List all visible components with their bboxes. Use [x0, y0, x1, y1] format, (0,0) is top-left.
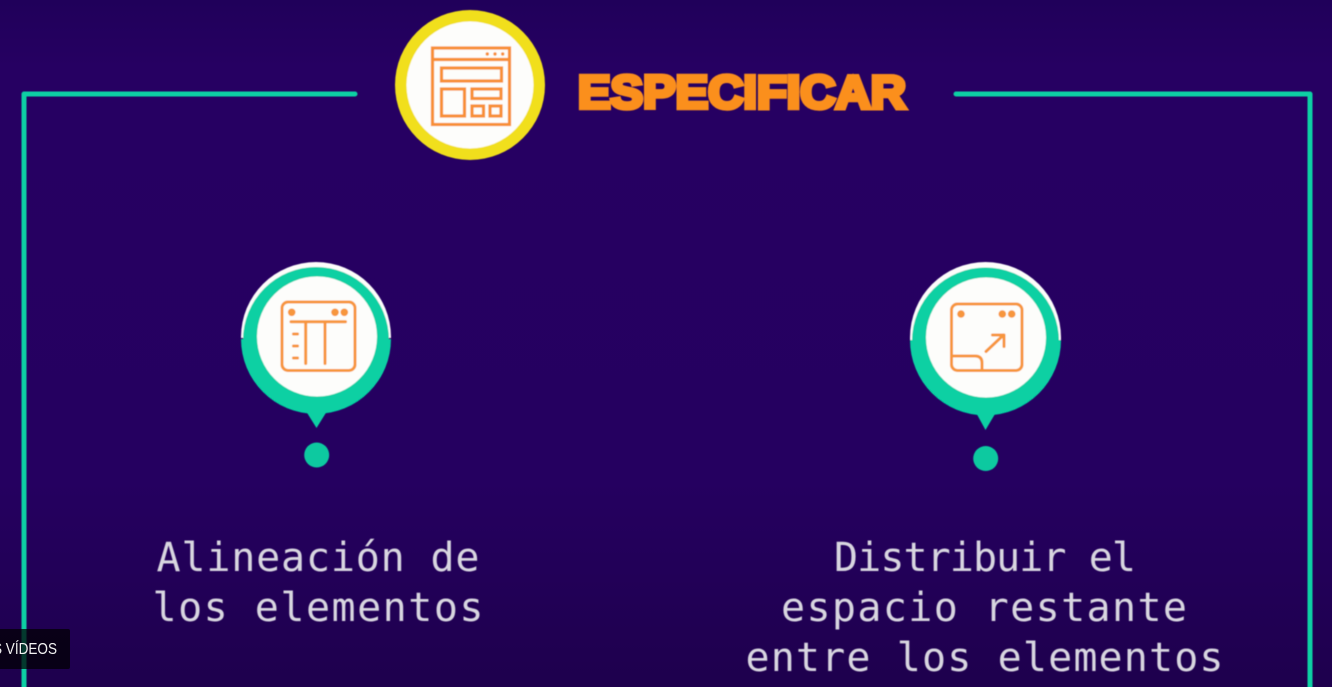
text block: right caption: espacio restante: [781, 585, 1187, 631]
video overlay label: [0, 629, 70, 669]
text block: right caption: entre los elementos: [746, 635, 1224, 681]
text block: left caption: [152, 535, 484, 631]
icon: table alignment: [282, 302, 355, 370]
text block: left caption: los elementos: [152, 585, 484, 631]
dot marker: right: [973, 446, 998, 471]
pin: distribute space icon: [910, 262, 1061, 430]
text block: right caption: [746, 535, 1224, 681]
frame: left bracket: [24, 94, 355, 687]
dot marker: left: [304, 442, 329, 468]
title: ESPECIFICAR: [578, 66, 906, 118]
pin: alignment icon: [241, 262, 391, 428]
icon: header badge with layout window: [395, 10, 545, 160]
frame: right bracket: [956, 94, 1310, 687]
text block: left caption: Alineación de: [156, 535, 480, 581]
text block: right caption: Distribuir el: [834, 535, 1136, 581]
icon: resize window: [952, 304, 1022, 370]
